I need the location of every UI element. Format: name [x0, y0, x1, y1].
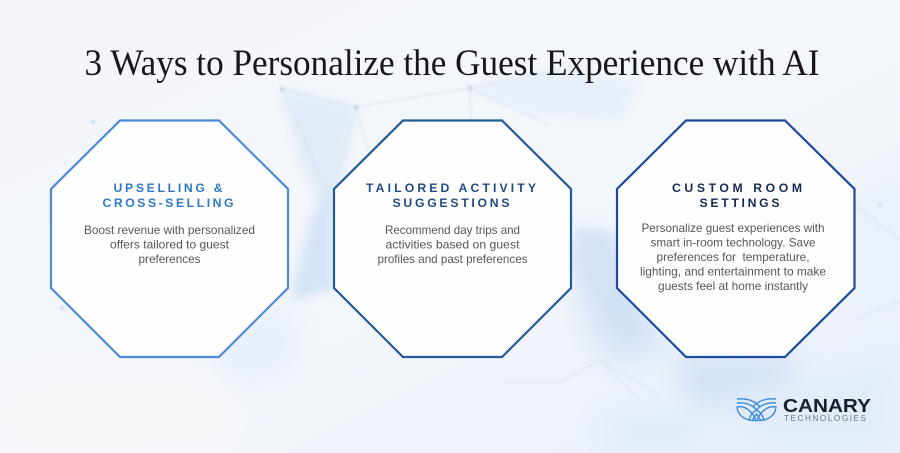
body text: upselling — [84, 223, 255, 266]
heading: tailored activity suggestions: TAILORED ACTIVITY — [366, 181, 536, 195]
body text: room settings: lighting, and entertainment to make — [640, 264, 826, 278]
body text: activity suggestions: activities based on guest — [386, 238, 520, 252]
body text: upselling: preferences — [138, 252, 200, 266]
body text: upselling: offers tailored to guest — [110, 238, 230, 252]
heading: tailored activity suggestions — [366, 181, 536, 210]
body text: activity suggestions: Recommend day trips and — [385, 223, 520, 237]
heading: custom room settings: CUSTOM ROOM — [672, 181, 802, 195]
body text: room settings: smart in-room technology. Save — [650, 236, 816, 250]
heading: custom room settings: SETTINGS — [700, 196, 780, 210]
panel: custom room settings — [617, 120, 854, 357]
panel: upselling and cross-selling — [51, 120, 288, 357]
heading: tailored activity suggestions: SUGGESTIONS — [392, 196, 510, 210]
body text: activity suggestions: profiles and past preferences — [378, 252, 528, 266]
octagon outline: upselling — [51, 120, 288, 357]
body text: activity suggestions — [378, 223, 528, 266]
heading: upselling and cross-selling: UPSELLING & — [114, 181, 223, 195]
heading: custom room settings — [672, 181, 802, 210]
wordmark: TECHNOLOGIES: TECHNOLOGIES — [784, 414, 867, 423]
logo: Canary Technologies — [737, 396, 871, 423]
heading: upselling and cross-selling — [102, 181, 234, 210]
background: network mesh — [60, 68, 900, 453]
body text: room settings: Personalize guest experiences with — [642, 221, 824, 235]
body text: room settings: guests feel at home instantly — [658, 279, 808, 293]
heading: upselling and cross-selling: CROSS-SELLING — [102, 196, 234, 210]
title: 3 Ways to Personalize the Guest Experience with AI — [84, 43, 820, 84]
octagon outline: room settings — [617, 120, 854, 357]
body text: room settings — [640, 221, 826, 293]
body text: room settings: preferences for temperature, — [656, 250, 810, 264]
icon: canary wings — [737, 399, 776, 421]
panel: tailored activity suggestions — [334, 120, 571, 357]
octagon outline: activity suggestions — [334, 120, 571, 357]
wordmark: CANARY: CANARY — [783, 396, 871, 416]
body text: upselling: Boost revenue with personalized — [84, 223, 255, 237]
